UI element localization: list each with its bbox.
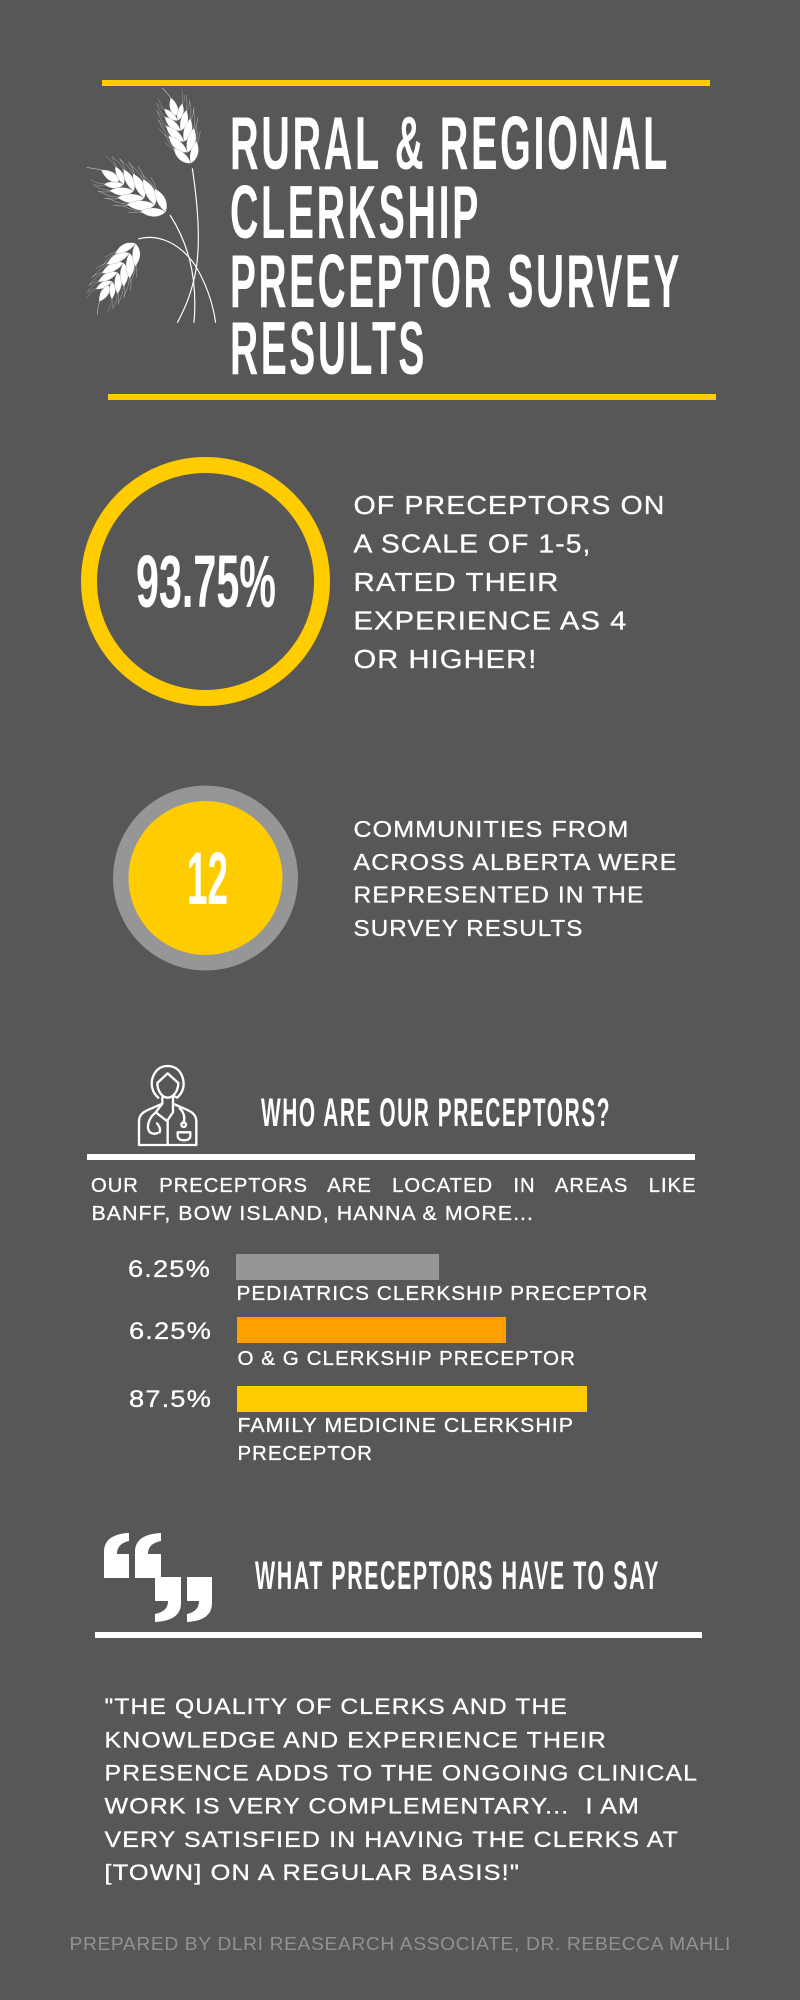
bar: family medicine 87.5%: PRECEPTOR: [238, 1443, 373, 1465]
header bottom rule: [108, 394, 716, 400]
stat text: preceptor rating: OR HIGHER!: [354, 644, 538, 674]
section rule: [95, 1632, 702, 1638]
title: RESULTS: [230, 307, 427, 391]
quote text: [TOWN] ON A REGULAR BASIS!": [104, 1860, 520, 1885]
bar: O and G 6.25%: [129, 1317, 576, 1370]
bar: pediatrics 6.25%: [128, 1254, 648, 1305]
quote text: KNOWLEDGE AND EXPERIENCE THEIR: [104, 1728, 607, 1752]
bar: family medicine 87.5%: [129, 1386, 587, 1465]
stat text: communities: REPRESENTED IN THE: [354, 882, 644, 908]
stat text: communities: [354, 816, 678, 941]
bar: pediatrics 6.25%: 6.25%: [128, 1256, 211, 1283]
stat circle: 12: 12: [187, 837, 228, 920]
section rule: [87, 1154, 695, 1160]
quote text: VERY SATISFIED IN HAVING THE CLERKS AT: [104, 1827, 679, 1852]
stat text: preceptor rating: EXPERIENCE AS 4: [354, 606, 628, 636]
stat circle: 12: [113, 786, 298, 970]
stat text: communities: ACROSS ALBERTA WERE: [354, 849, 678, 875]
stat text: preceptor rating: OF PRECEPTORS ON: [354, 490, 666, 520]
stat text: preceptor rating: A SCALE OF 1-5,: [354, 528, 592, 558]
bar: family medicine 87.5%: 87.5%: [129, 1386, 212, 1413]
icon: quotation marks: [104, 1533, 212, 1622]
title: [230, 102, 682, 391]
stat ring: 93.75%: 93.75%: [136, 540, 276, 623]
title: CLERKSHIP: [230, 171, 481, 255]
text: preceptor locations: BANFF, BOW ISLAND, HANNA & MORE...: [92, 1202, 534, 1225]
stat text: communities: SURVEY RESULTS: [354, 915, 584, 941]
quote text: "THE QUALITY OF CLERKS AND THE: [104, 1694, 568, 1719]
quote text: [104, 1694, 698, 1885]
bar chart: preceptor specialties: [128, 1254, 648, 1465]
bar: pediatrics 6.25%: PEDIATRICS CLERKSHIP PRECEPTOR: [236, 1283, 648, 1305]
icon: doctor: [139, 1066, 196, 1145]
text: preceptor locations: [91, 1174, 696, 1225]
bar: O and G 6.25%: O & G CLERKSHIP PRECEPTOR: [238, 1348, 576, 1370]
bar: O and G 6.25%: 6.25%: [129, 1318, 212, 1345]
stat text: preceptor rating: [354, 490, 666, 674]
footer credit: PREPARED BY DLRI REASEARCH ASSOCIATE, DR. REBECCA MAHLI: [70, 1934, 731, 1954]
bar: family medicine 87.5%: FAMILY MEDICINE CLERKSHIP: [238, 1415, 574, 1437]
stat text: communities: COMMUNITIES FROM: [354, 816, 630, 842]
stat ring: 93.75%: [89, 465, 322, 698]
stat text: preceptor rating: RATED THEIR: [354, 567, 560, 597]
quote text: WORK IS VERY COMPLEMENTARY... I AM: [104, 1794, 640, 1818]
header top rule: [102, 80, 710, 86]
text: preceptor locations: OUR PRECEPTORS ARE LOCATED IN AREAS LIKE: [91, 1174, 696, 1197]
icon: wheat stalks: [75, 80, 216, 323]
quote text: PRESENCE ADDS TO THE ONGOING CLINICAL: [104, 1760, 698, 1786]
